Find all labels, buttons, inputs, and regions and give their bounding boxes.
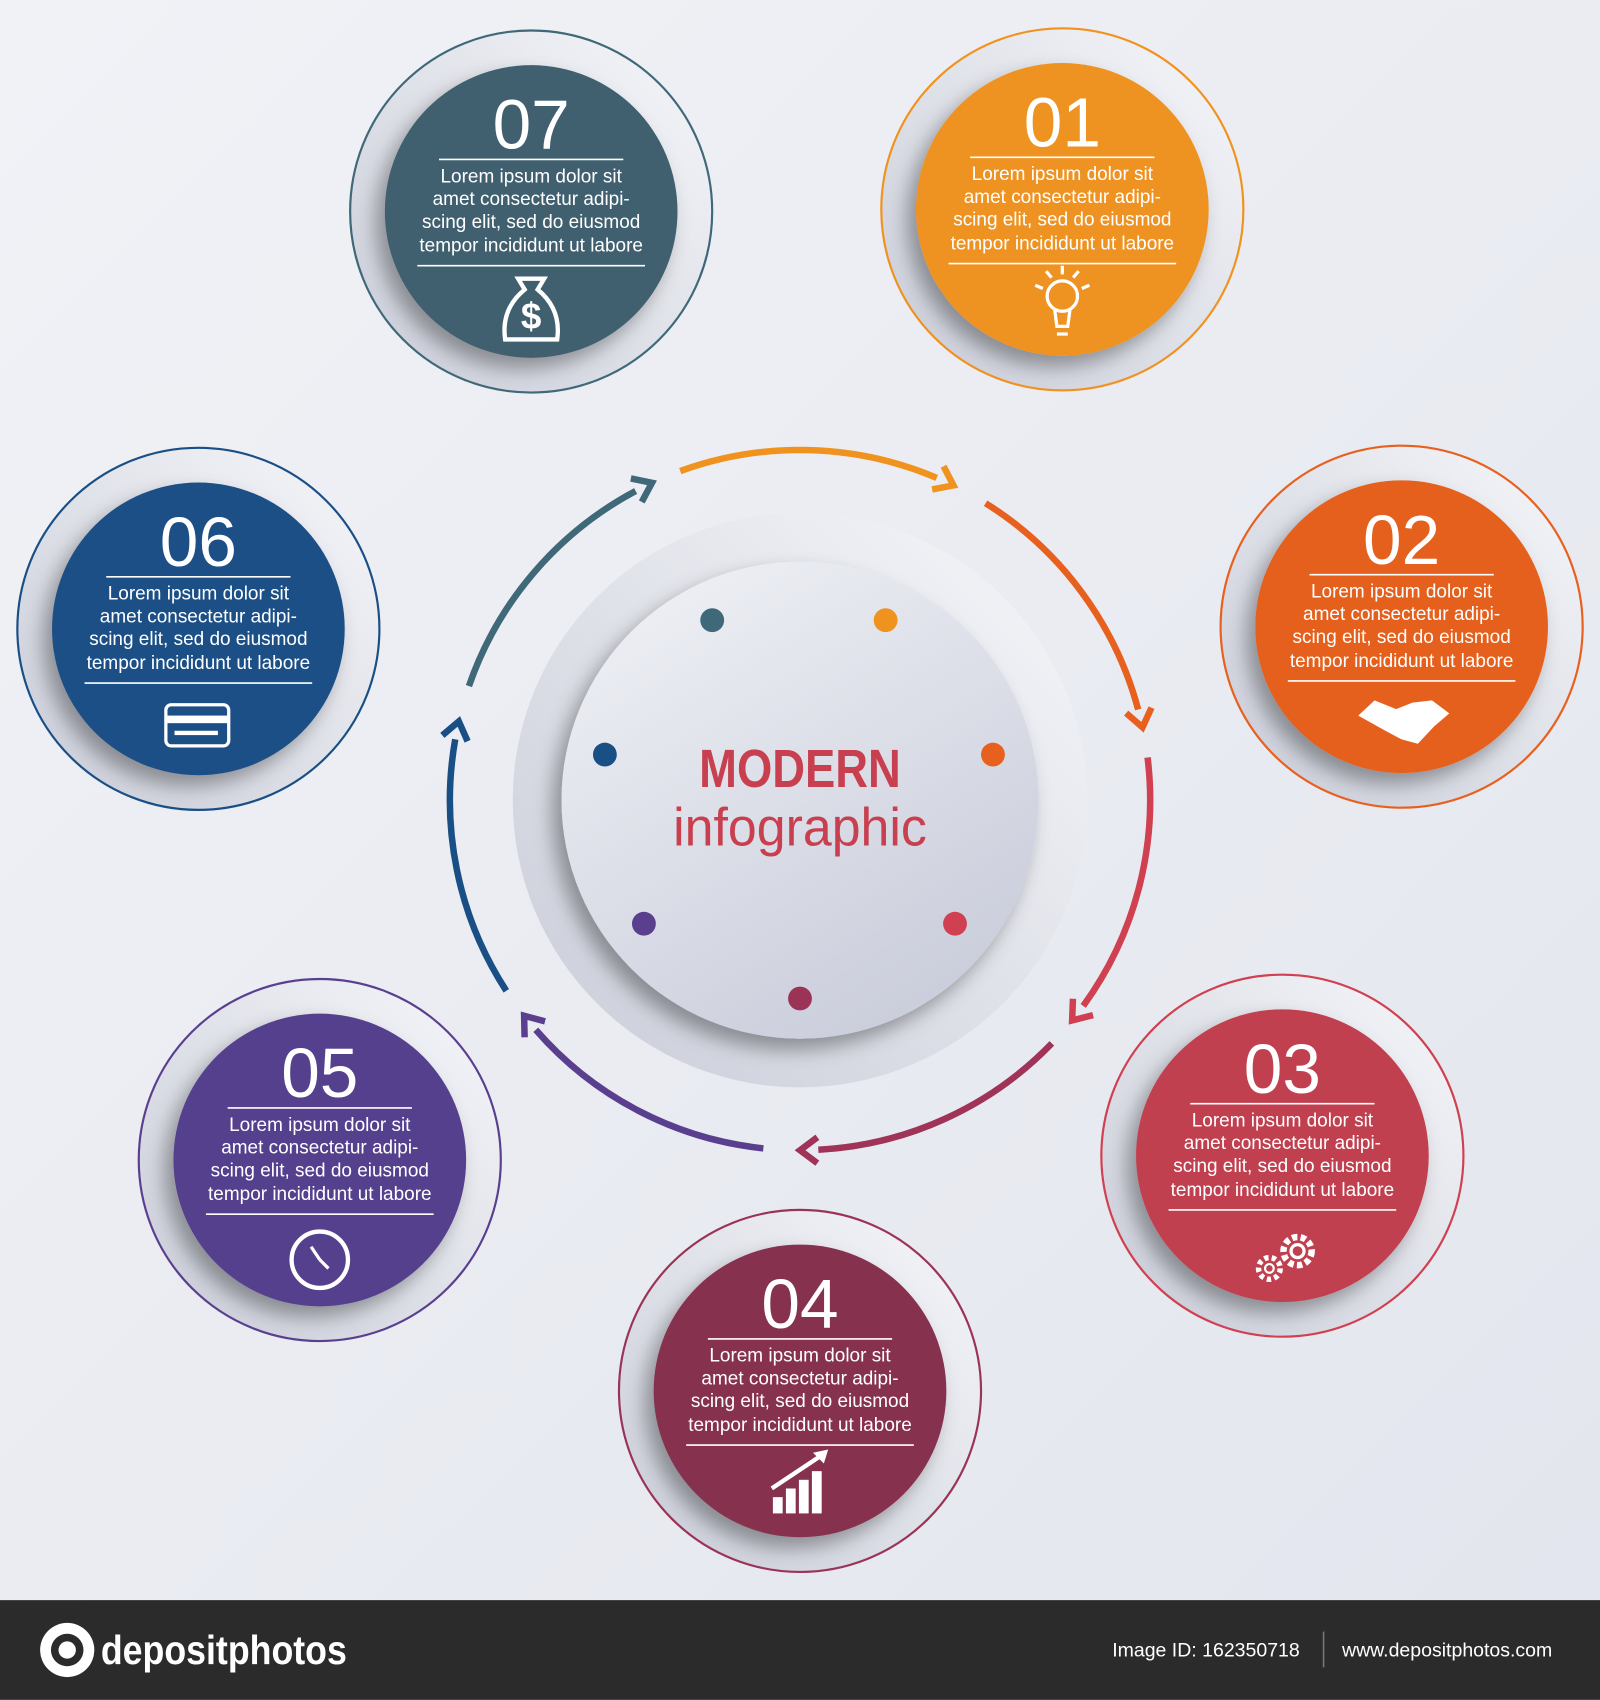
- panel: 04: Lorem ipsum dolor sit: [709, 1346, 891, 1367]
- panel: 06: scing elit, sed do eiusmod: [89, 629, 308, 650]
- panel: 05: Lorem ipsum dolor sit: [229, 1115, 411, 1136]
- panel: 01: amet consectetur adipi-: [964, 187, 1161, 208]
- panel: 07: 07: [493, 86, 570, 164]
- panel: 07: amet consectetur adipi-: [433, 189, 630, 210]
- image id: Image ID: 162350718: [1112, 1640, 1300, 1662]
- panel: 03: Lorem ipsum dolor sit: [1192, 1110, 1374, 1131]
- panel: 05: tempor incididunt ut labore: [208, 1184, 432, 1205]
- panel: 05: 05: [281, 1034, 358, 1112]
- panel: 02: amet consectetur adipi-: [1303, 604, 1500, 625]
- icon: money bag: $: [521, 296, 541, 337]
- icon: logo camera: [40, 1623, 94, 1677]
- panel: 05: [139, 979, 501, 1341]
- panel: 06: amet consectetur adipi-: [100, 606, 297, 627]
- panel: 01: scing elit, sed do eiusmod: [953, 210, 1171, 231]
- panel: 04: scing elit, sed do eiusmod: [691, 1391, 909, 1412]
- panel: 03: [1101, 975, 1463, 1337]
- icon: gears: [1259, 1237, 1312, 1279]
- panel: 02: Lorem ipsum dolor sit: [1311, 581, 1493, 602]
- panel: 07: scing elit, sed do eiusmod: [422, 212, 640, 233]
- panel: 01: [881, 28, 1243, 390]
- title: [673, 739, 927, 858]
- panel: 01: 01: [1024, 83, 1101, 161]
- panel: 03: amet consectetur adipi-: [1184, 1133, 1381, 1154]
- panel: 06: tempor incididunt ut labore: [87, 653, 310, 674]
- panel: 02: scing elit, sed do eiusmod: [1292, 627, 1511, 648]
- panel: 05: scing elit, sed do eiusmod: [211, 1160, 429, 1181]
- panel: 02: [1221, 446, 1583, 808]
- panel: 01: Lorem ipsum dolor sit: [972, 164, 1154, 185]
- panel: 07: tempor incididunt ut labore: [419, 236, 643, 257]
- panel: 06: Lorem ipsum dolor sit: [108, 584, 290, 605]
- panel: 07: [350, 30, 712, 393]
- title: infographic: [673, 798, 927, 858]
- footer: [0, 1600, 1600, 1700]
- center panel: [513, 513, 1087, 1087]
- panel: 06: 06: [160, 503, 237, 581]
- panel: 04: [619, 1210, 981, 1572]
- icon: credit card: [166, 705, 229, 746]
- arrow ring: [358, 369, 1201, 1231]
- icon: handshake: [1358, 700, 1449, 744]
- panel: 03: 03: [1244, 1030, 1321, 1108]
- panel: 02: 02: [1363, 501, 1440, 579]
- title: MODERN: [699, 739, 901, 799]
- url: www.depositphotos.com: [1341, 1640, 1552, 1662]
- panel: 03: tempor incididunt ut labore: [1171, 1180, 1394, 1201]
- panel: 02: tempor incididunt ut labore: [1290, 651, 1513, 672]
- panel: 01: tempor incididunt ut labore: [951, 233, 1174, 254]
- panel: 05: amet consectetur adipi-: [221, 1138, 418, 1159]
- icon: growth chart: [772, 1449, 828, 1513]
- logo text: depositphotos: [101, 1627, 347, 1673]
- panel: 07: Lorem ipsum dolor sit: [441, 166, 623, 187]
- icon: money bag: [504, 279, 558, 339]
- panel: 03: scing elit, sed do eiusmod: [1173, 1156, 1392, 1177]
- panel: 04: amet consectetur adipi-: [701, 1368, 899, 1389]
- panel: 04: 04: [761, 1265, 839, 1343]
- panel: 04: tempor incididunt ut labore: [688, 1415, 912, 1436]
- panel: 06: [17, 448, 379, 810]
- icon: light bulb: [1035, 266, 1089, 334]
- icon: clock: [292, 1232, 348, 1288]
